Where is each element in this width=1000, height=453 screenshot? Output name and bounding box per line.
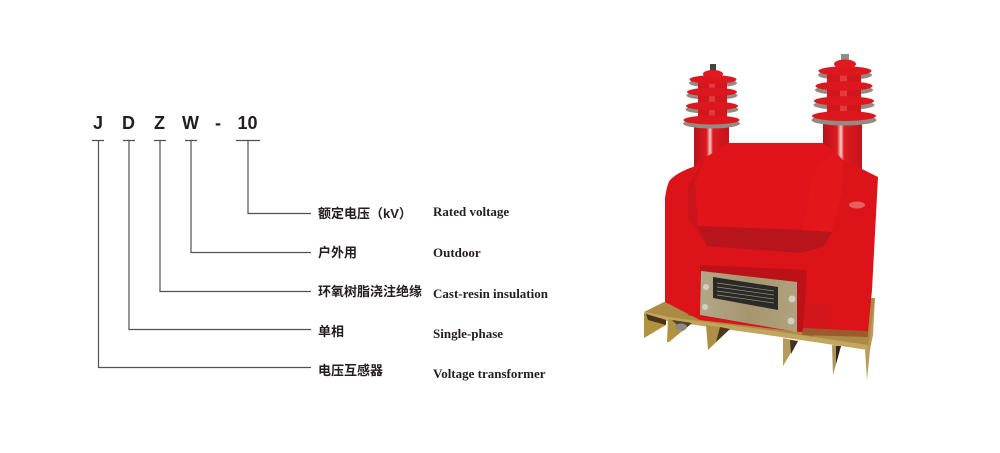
mounting base: [644, 298, 875, 380]
leader lines: [92, 140, 311, 368]
left insulator column: [694, 118, 729, 168]
model code letters: J: [93, 113, 103, 133]
glossy highlight: [849, 202, 865, 208]
product illustration: voltage transformer: [644, 54, 878, 380]
model code letters: -: [215, 113, 221, 133]
label: rated voltage (Chinese): 额定电压（kV）: [318, 206, 412, 221]
drum front: [695, 143, 835, 228]
brown strip: [802, 328, 868, 337]
transformer body: [665, 143, 878, 337]
nameplate frame: [700, 265, 807, 332]
label: rated voltage (English): Rated voltage: [433, 204, 509, 219]
label: cast-resin insulation (Chinese): 环氧树脂浇注绝缘: [318, 284, 422, 299]
model code diagram: [92, 140, 311, 368]
drum right facet: [802, 152, 843, 232]
label: voltage transformer (English): Voltage transformer: [433, 366, 546, 381]
drum left band: [688, 158, 707, 246]
label: single-phase (Chinese): 单相: [318, 324, 344, 339]
label: single-phase (English): Single-phase: [433, 326, 503, 341]
label: outdoor (Chinese): 户外用: [318, 245, 357, 260]
right insulator column: [823, 116, 862, 172]
drum lower shadow band: [698, 226, 832, 253]
model code letters: D: [122, 113, 135, 133]
label: outdoor (English): Outdoor: [433, 245, 481, 260]
model code letters: 10: [238, 113, 258, 133]
nameplate: [700, 271, 797, 332]
left insulator sheds: [683, 64, 740, 128]
label: voltage transformer (Chinese): 电压互感器: [318, 363, 383, 378]
label: cast-resin insulation (English): Cast-resin insulation: [433, 286, 548, 301]
lower right box: [805, 303, 828, 330]
model code letters: [93, 113, 258, 133]
model code letters: W: [182, 113, 199, 133]
model code letters: Z: [154, 113, 165, 133]
right insulator sheds: [812, 54, 876, 126]
base teeth: [644, 313, 666, 338]
base bolts: [675, 324, 687, 330]
